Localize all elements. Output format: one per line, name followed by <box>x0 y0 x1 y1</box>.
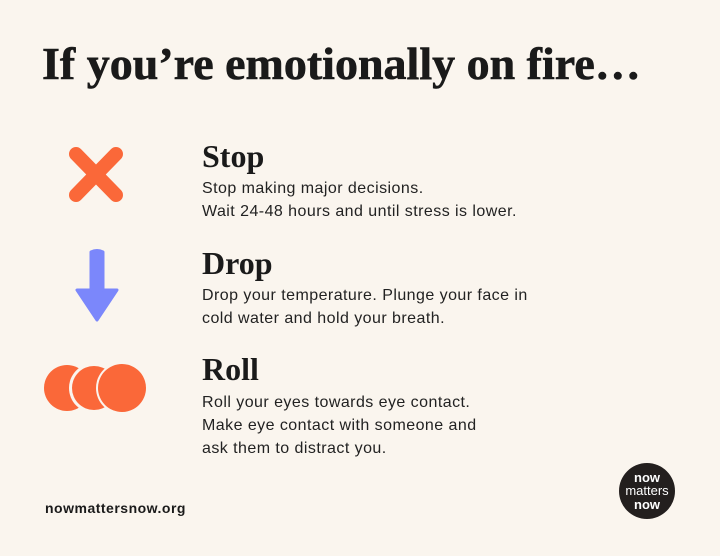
text: stop <box>202 180 517 220</box>
title: If you’re emotionally on fire… <box>42 38 641 89</box>
icon: down arrow <box>75 249 118 322</box>
text: roll <box>202 394 477 457</box>
logo: matters <box>625 483 669 498</box>
text: drop: cold water and hold your breath. <box>202 310 445 327</box>
heading: roll: Roll <box>202 351 259 387</box>
text: drop: Drop your temperature. Plunge your face in <box>202 287 528 304</box>
text: stop: Wait 24-48 hours and until stress is lower. <box>202 203 517 220</box>
icon: circles <box>44 364 146 412</box>
icon: x <box>69 147 123 202</box>
logo <box>619 463 675 519</box>
text: roll: ask them to distract you. <box>202 440 387 457</box>
text: stop: Stop making major decisions. <box>202 180 424 197</box>
logo: now <box>634 497 660 512</box>
heading: stop: Stop <box>202 138 264 174</box>
text: roll: Roll your eyes towards eye contact. <box>202 394 470 411</box>
url: nowmattersnow.org <box>45 500 186 516</box>
heading: drop: Drop <box>202 245 273 281</box>
logo: now <box>634 470 660 485</box>
text: roll: Make eye contact with someone and <box>202 417 477 434</box>
text: drop <box>202 287 528 327</box>
